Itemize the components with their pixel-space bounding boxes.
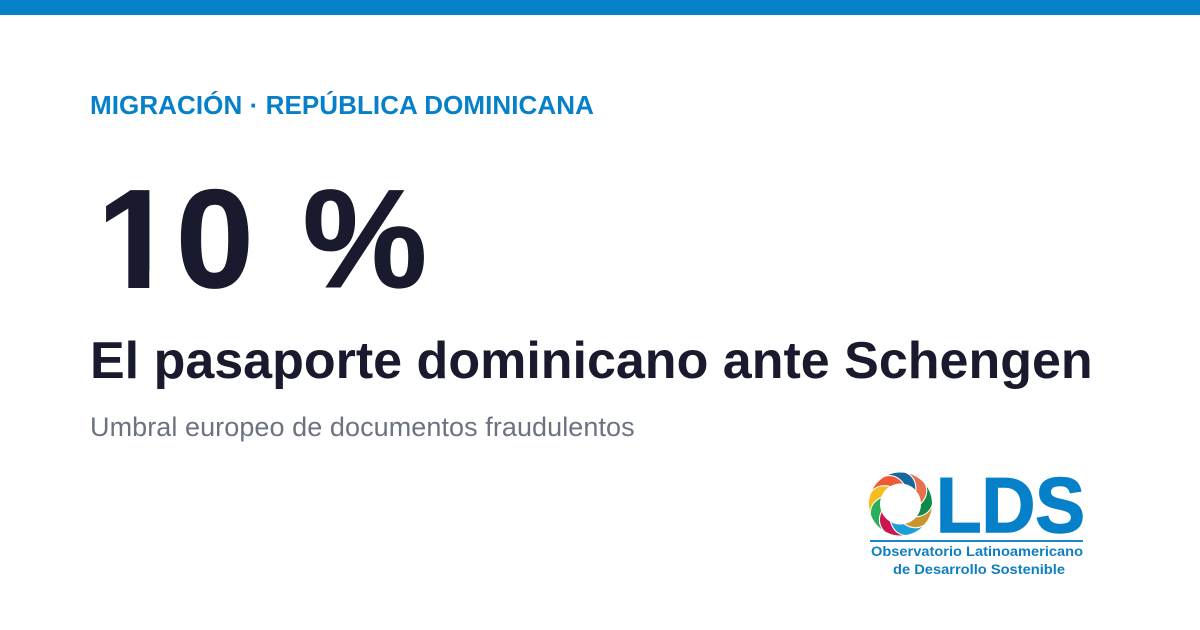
eyebrow label: MIGRACIÓN · REPÚBLICA DOMINICANA <box>90 90 594 120</box>
top accent bar <box>0 0 1200 15</box>
icon: colour ring <box>864 469 937 541</box>
subtitle: Umbral europeo de documentos fraudulentos <box>90 412 635 442</box>
logo name line 2: de Desarrollo Sostenible <box>893 561 1065 577</box>
logo: OLDS <box>868 461 1085 577</box>
logo rule <box>870 540 1083 542</box>
logo letters: LDS <box>936 461 1085 549</box>
headline: El pasaporte dominicano ante Schengen <box>90 332 1093 390</box>
logo name line 1: Observatorio Latinoamericano <box>871 543 1083 559</box>
big number: 10 % <box>97 160 432 317</box>
